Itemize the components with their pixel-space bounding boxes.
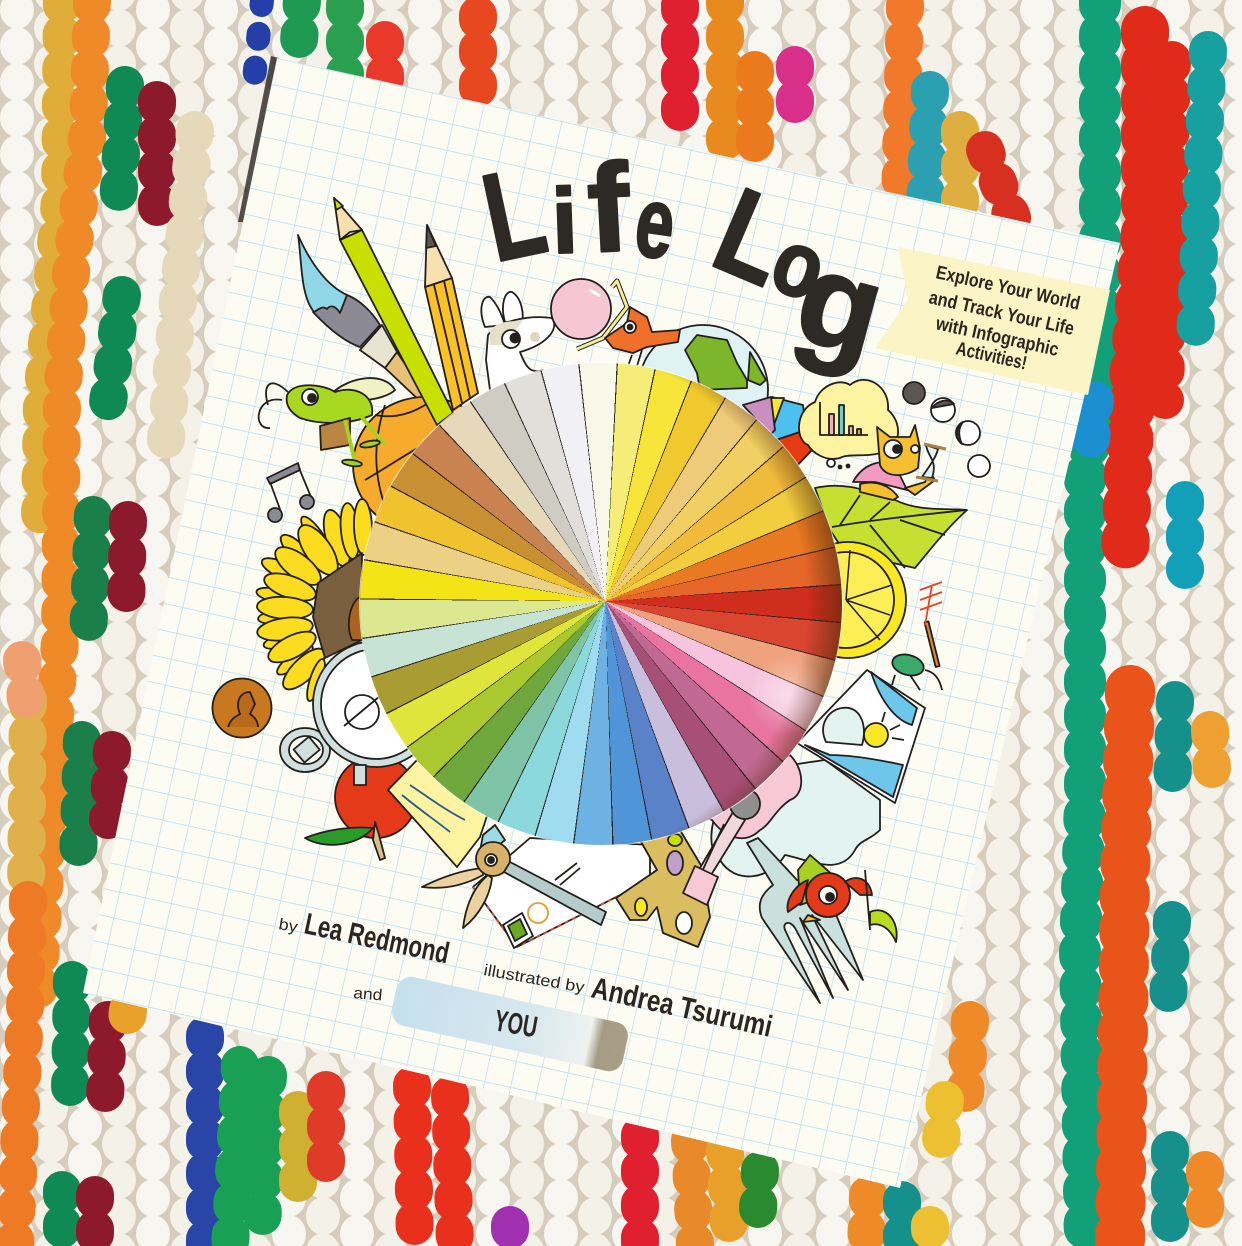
icon: apple (305, 756, 417, 860)
icon: grasshopper (259, 378, 395, 467)
banner text: Explore Your World (934, 262, 1082, 315)
icon: llama (481, 292, 554, 395)
color wheel (360, 363, 842, 845)
icon: music notes (267, 463, 314, 522)
icon: palette (616, 830, 710, 947)
icon: bunny with hat (422, 825, 510, 928)
title: Life Log: o (759, 209, 839, 322)
you slot (389, 974, 631, 1074)
icon: bug and feather (890, 582, 942, 690)
author text (277, 908, 775, 1044)
icon: green pencil (334, 198, 453, 425)
icon: pumpkin (353, 395, 497, 533)
icon: moon phases (903, 382, 990, 477)
book cover (83, 58, 1120, 1188)
icon: cat with hourglass (853, 425, 946, 500)
title: Life Log: L (697, 162, 808, 312)
title: Life Log (472, 138, 899, 385)
icon: stopwatch (280, 641, 439, 785)
banner text: Activities! (954, 338, 1029, 374)
icon: sunflower (255, 499, 373, 703)
book spine shadow (238, 56, 279, 222)
icon: yellow pencil (425, 225, 478, 410)
title: Life Log: L (472, 141, 557, 289)
author text: illustrated by (482, 962, 586, 997)
icon: thought cloud with bar chart (799, 380, 898, 468)
icon: ukulele (683, 789, 760, 905)
icon: envelope (473, 838, 650, 948)
icon: pie chart (743, 397, 812, 470)
icon: lemon (790, 542, 906, 658)
icon: paint brush (298, 235, 427, 403)
author text: and (353, 985, 383, 1005)
icon: window (797, 670, 925, 803)
author text: Andrea Tsurumi (588, 972, 775, 1044)
author text: Lea Redmond (302, 908, 452, 970)
icon: globe (638, 325, 768, 455)
icon: leaf (815, 486, 967, 568)
icon: pink cloud and pale cloud (700, 755, 880, 876)
title: Life Log: i (550, 170, 579, 273)
icon: orange bird and worm (577, 281, 680, 366)
icon: pen (504, 862, 606, 925)
banner (875, 247, 1110, 395)
icon: notecard (388, 760, 488, 867)
title: Life Log: g (783, 222, 899, 385)
banner text: and Track Your Life (927, 287, 1076, 340)
icon: penny (212, 678, 272, 738)
author text: by (277, 916, 299, 936)
title: Life Log: f (584, 138, 633, 279)
icon: bird on fork (787, 855, 897, 942)
title: Life Log: e (629, 166, 682, 281)
icon: bubble gum (551, 279, 611, 339)
banner text: with Infographic (933, 313, 1061, 361)
author text: YOU (492, 1004, 540, 1044)
banner text (927, 262, 1082, 374)
icon: fork (747, 838, 863, 1003)
